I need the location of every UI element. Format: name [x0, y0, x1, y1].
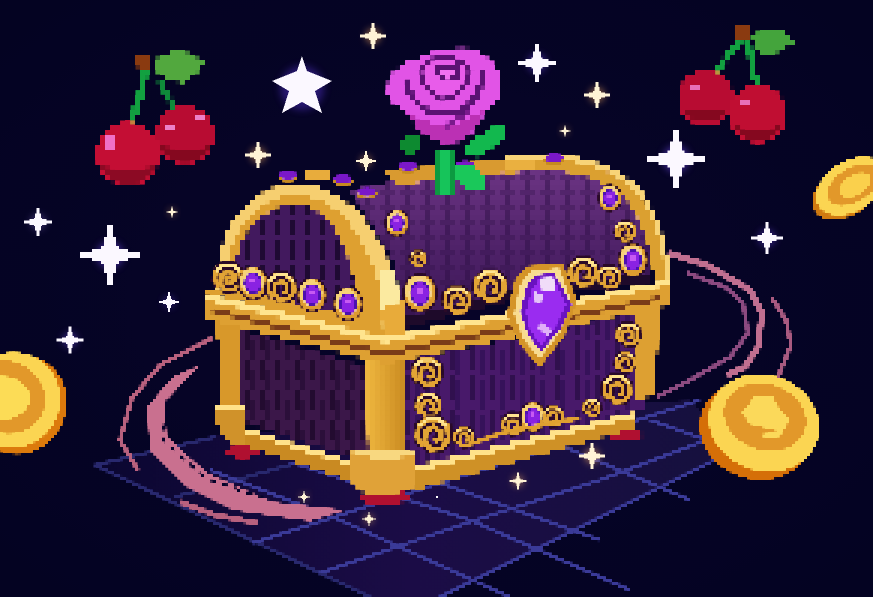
corner post: [365, 350, 405, 450]
base rail: left: [245, 428, 354, 482]
lock plate with large purple gem: [507, 263, 577, 367]
front panel ornaments: [414, 325, 638, 449]
cherries: left: [96, 51, 214, 186]
rose bloom: [387, 48, 501, 143]
ornaments and gems: [215, 154, 648, 449]
chest feet: [227, 428, 643, 505]
lid front corner highlight: [378, 270, 402, 335]
five-point star: [272, 56, 332, 113]
left side panel: [235, 328, 370, 462]
lid top: [350, 167, 652, 325]
front lid ornaments: [385, 184, 648, 313]
rose stem: [435, 148, 455, 193]
arch inner panel: [232, 203, 362, 318]
front panel: [400, 312, 645, 470]
coin: lower right: [687, 360, 832, 494]
coin: left edge: [0, 337, 83, 470]
chest body: [203, 157, 669, 505]
left corner block: [217, 405, 247, 446]
right post: [637, 300, 660, 400]
sparkles: white and lilac: [24, 44, 783, 354]
sparkles: warm gold: [166, 23, 610, 526]
isometric floor grid: [95, 400, 735, 597]
rose leaves: [400, 124, 507, 190]
lid rim band: [203, 280, 669, 364]
chest: [203, 154, 669, 505]
lid right gold trim: [505, 165, 660, 282]
lid back edge: [385, 160, 510, 186]
left post: [213, 318, 240, 412]
top rim gold blocks: [306, 171, 332, 181]
magic swirl: left: [120, 338, 345, 523]
lid front lower shadow strip: [405, 273, 652, 328]
left lid ornaments: [215, 265, 363, 321]
top rim gems: [278, 154, 564, 199]
rose: [387, 48, 507, 193]
base rail: front: [415, 412, 635, 490]
magic swirl: right: [657, 253, 791, 397]
lid arch: left side: [205, 183, 402, 340]
cherries: right: [678, 25, 796, 143]
coin: top right: [802, 145, 873, 231]
front corner block: [352, 448, 417, 497]
